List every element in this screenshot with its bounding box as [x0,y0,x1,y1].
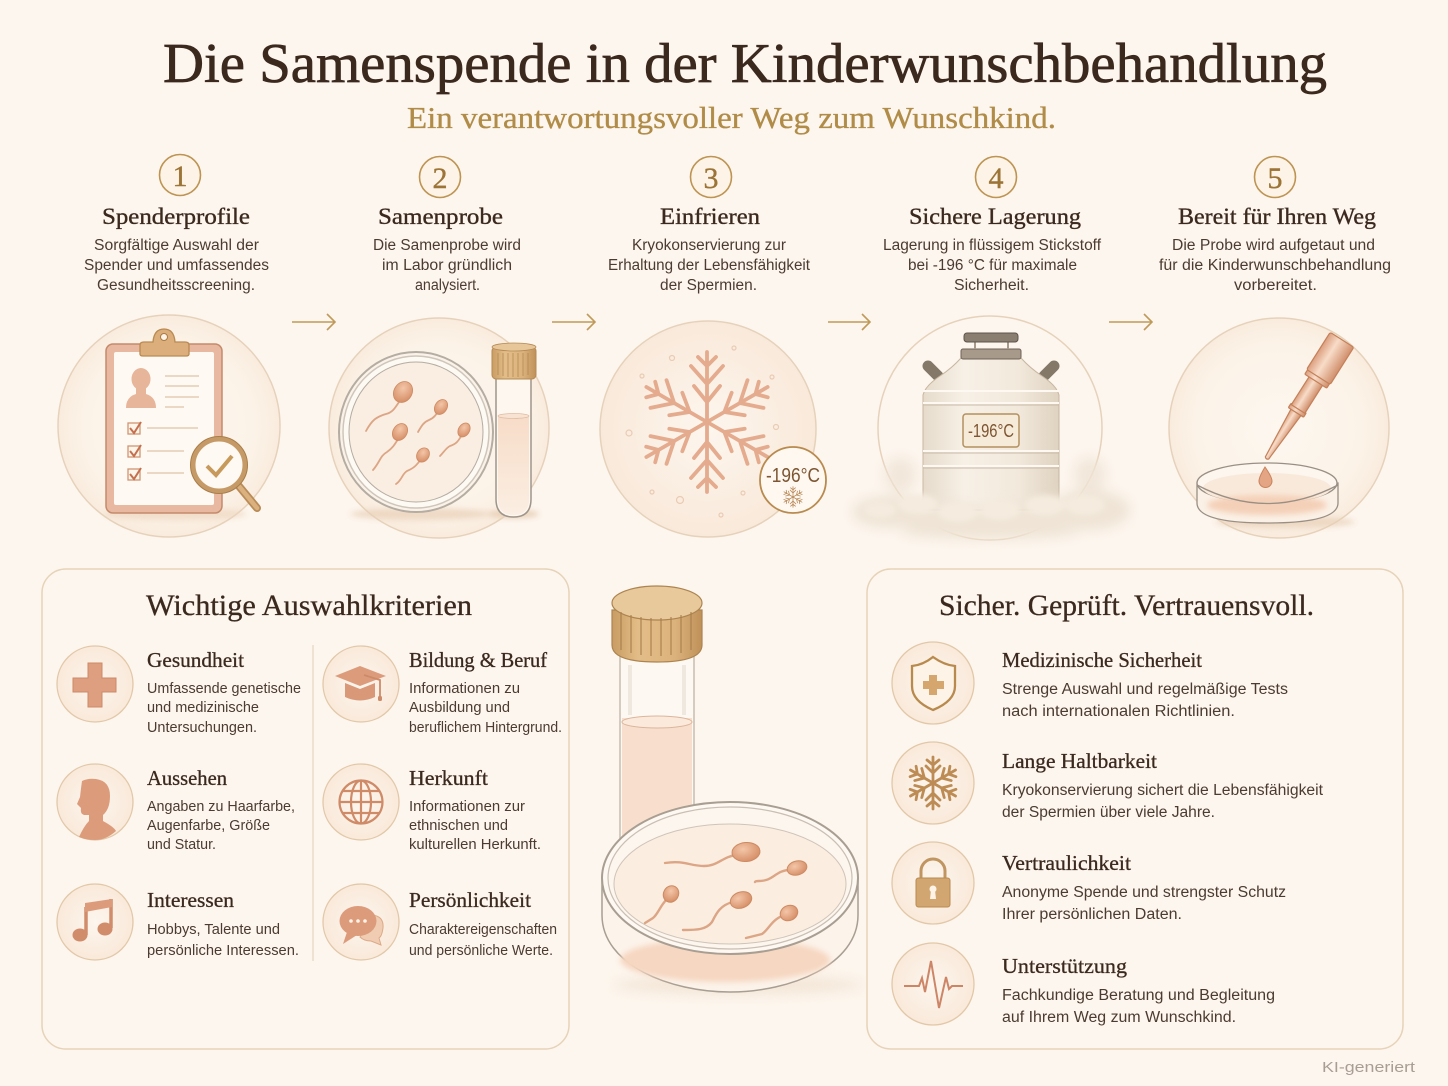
item: Gesundheit: und medizinische [147,700,259,716]
item: Aussehen: und Statur. [147,837,216,853]
step 4 heading: Sichere Lagerung [909,204,1082,229]
item: Persönlichkeit [323,884,557,960]
number badge 4: 4 [988,162,1004,195]
step 3 description [608,237,811,294]
step 4 description: Lagerung in flüssigem Stickstoff [883,237,1102,254]
icon: music note [57,884,133,960]
item: Unterstützung: Fachkundige Beratung und Begleitung [1002,987,1275,1004]
item: Persönlichkeit: und persönliche Werte. [409,943,553,959]
step 3 description: Erhaltung der Lebensfähigkeit [608,257,811,274]
item: Gesundheit: Umfassende genetische [147,681,301,697]
step 3 heading: Einfrieren [660,204,761,229]
item: Vertraulichkeit [892,842,1286,924]
number badge 3 [690,156,732,198]
item: Bildung & Beruf: Bildung & Beruf [409,648,547,672]
item: Vertraulichkeit: Ihrer persönlichen Daten. [1002,906,1182,923]
step 3 description: Kryokonservierung zur [632,237,786,254]
item: Bildung & Beruf: Informationen zu [409,681,520,697]
panel heading: Wichtige Auswahlkriterien [146,589,472,622]
icon: speech bubbles [323,884,399,960]
step 5 heading: Bereit für Ihren Weg [1178,204,1377,229]
item: Aussehen: Angaben zu Haarfarbe, [147,799,295,815]
panel: Sicher. Geprüft. Vertrauensvoll. [867,569,1403,1049]
step 1: Spenderprofile [58,154,280,537]
item: Herkunft: ethnischen und [409,818,508,834]
step 4 description [883,237,1102,294]
arrow 4 to 5 [1109,314,1152,330]
item: Medizinische Sicherheit: nach internationalen Richtlinien. [1002,703,1235,720]
item: Persönlichkeit: Charaktereigenschaften [409,922,557,938]
item: Lange Haltbarkeit: Lange Haltbarkeit [1002,749,1157,773]
step 1 description [84,237,269,294]
item: Gesundheit: Untersuchungen. [147,720,257,736]
number badge 5 [1254,156,1296,198]
step 5 description: Die Probe wird aufgetaut und [1172,237,1375,254]
item: Medizinische Sicherheit: Strenge Auswahl und regelmäßige Tests [1002,681,1288,698]
subtitle: Ein verantwortungsvoller Weg zum Wunschkind. [407,100,1056,135]
illustration: snowflake with -196 °C badge: -196°C [766,465,820,487]
step 1 description: Gesundheitsscreening. [97,277,255,294]
item: Bildung & Beruf: beruflichem Hintergrund. [409,720,562,736]
item: Herkunft: kulturellen Herkunft. [409,837,541,853]
number badge 2 [420,156,460,198]
title: Die Samenspende in der Kinderwunschbehandlung [163,33,1327,95]
step 5 description [1159,237,1391,294]
item: Gesundheit: Gesundheit [147,648,244,672]
central illustration: vial and petri dish [602,586,863,995]
icon: padlock [892,842,974,924]
item: Aussehen [57,764,295,853]
arrow 2 to 3 [552,314,595,330]
item: Aussehen: Augenfarbe, Größe [147,818,270,834]
number badge 1 [160,154,200,196]
number badge 5: 5 [1268,162,1282,195]
step 4 description: Sicherheit. [954,277,1029,294]
illustration: petri dish and test tube [329,318,549,538]
item: Persönlichkeit: Persönlichkeit [409,888,531,912]
item: Lange Haltbarkeit [892,742,1324,824]
step 2 description: analysiert. [415,277,480,294]
step 1 heading: Spenderprofile [102,204,250,229]
item: Interessen: Interessen [147,888,234,912]
illustration: snowflake with -196 °C badge [600,321,826,537]
item: Gesundheit [57,646,301,736]
step 4 description: bei -196 °C für maximale [908,257,1077,274]
number badge 4 [976,156,1016,198]
number badge 2: 2 [432,162,448,195]
item: Vertraulichkeit: Anonyme Spende und strengster Schutz [1002,884,1286,901]
item: Bildung & Beruf: Ausbildung und [409,700,510,716]
item: Aussehen: Aussehen [147,766,227,790]
icon: medical cross [57,646,133,722]
step 3 description: der Spermien. [660,277,757,294]
illustration: nitrogen tank in cold mist [852,316,1130,540]
panel heading: Sicher. Geprüft. Vertrauensvoll. [939,589,1314,622]
item: Lange Haltbarkeit: der Spermien über viele Jahre. [1002,804,1215,821]
step 2: Samenprobe [329,156,549,538]
item: Herkunft: Informationen zur [409,799,525,815]
step 2 heading: Samenprobe [378,204,503,229]
step 5 description: vorbereitet. [1234,277,1317,294]
icon: globe [323,764,399,840]
illustration: pipette and dish [1169,318,1389,538]
panel: Wichtige Auswahlkriterien [42,569,569,1049]
item: Interessen: Hobbys, Talente und [147,922,280,938]
item: Medizinische Sicherheit [892,642,1288,724]
icon: shield with cross [892,642,974,724]
icon: heartbeat pulse [892,943,974,1025]
item: Interessen: persönliche Interessen. [147,943,299,959]
icon: snowflake [892,742,974,824]
item: Unterstützung: auf Ihrem Weg zum Wunschkind. [1002,1009,1236,1026]
item: Unterstützung [892,943,1275,1026]
step 2 description: Die Samenprobe wird [373,237,521,254]
step 3: Einfrieren [600,156,826,537]
step 2 description [373,237,521,294]
item: Herkunft: Herkunft [409,766,488,790]
item: Bildung & Beruf [323,646,562,736]
step 1 description: Spender und umfassendes [84,257,269,274]
item: Lange Haltbarkeit: Kryokonservierung sichert die Lebensfähigkeit [1002,782,1324,799]
step 1 description: Sorgfältige Auswahl der [94,237,259,254]
number badge 1: 1 [172,160,188,193]
step 4: Sichere Lagerung [852,156,1130,540]
icon: graduation cap [323,646,399,722]
item: Unterstützung: Unterstützung [1002,954,1128,978]
arrow 3 to 4 [828,314,870,330]
watermark: KI-generiert [1322,1059,1416,1076]
number badge 3: 3 [704,162,718,195]
item: Medizinische Sicherheit: Medizinische Sicherheit [1002,648,1202,672]
item: Interessen [57,884,299,960]
illustration: nitrogen tank in cold mist: -196°C [968,421,1014,441]
item: Vertraulichkeit: Vertraulichkeit [1002,851,1131,875]
step 2 description: im Labor gründlich [382,257,512,274]
icon: head silhouette [57,764,133,840]
item: Herkunft [323,764,541,853]
step 5: Bereit für Ihren Weg [1159,156,1391,538]
step 5 description: für die Kinderwunschbehandlung [1159,257,1391,274]
illustration: clipboard with magnifier [58,315,280,537]
arrow 1 to 2 [292,314,335,330]
